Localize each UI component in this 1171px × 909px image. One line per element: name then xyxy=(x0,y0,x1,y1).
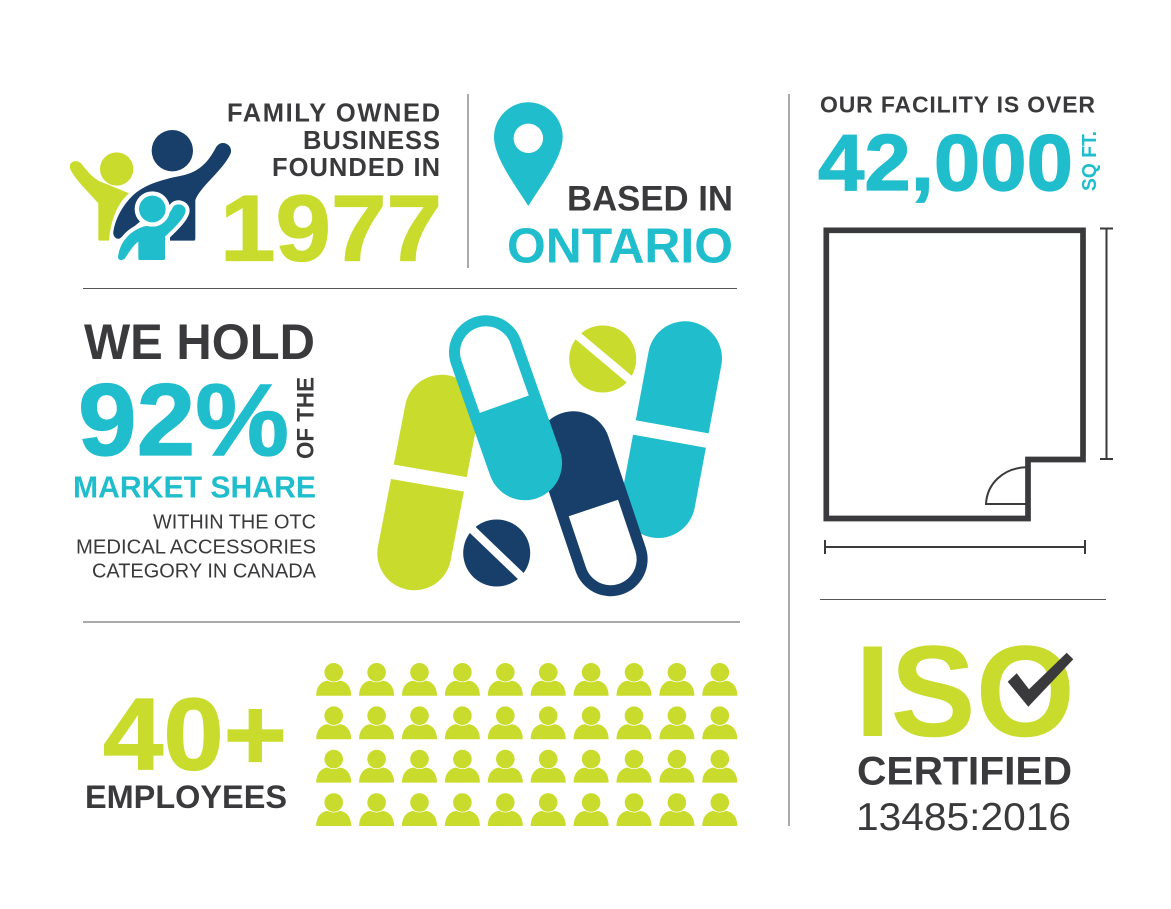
text: based in Ontario: BASED IN xyxy=(567,180,733,219)
text: based in Ontario: ONTARIO xyxy=(507,218,733,273)
heading: family owned business: BUSINESS xyxy=(303,127,440,155)
icon grid: employees xyxy=(316,663,737,826)
text: market share xyxy=(73,314,320,582)
number: 40+ employees: EMPLOYEES xyxy=(85,779,287,815)
badge: ISO certified: 13485:2016 xyxy=(856,796,1071,839)
badge: ISO certified: CERTIFIED xyxy=(857,750,1072,794)
text: facility size: SQ FT. xyxy=(1079,131,1101,191)
badge: ISO certified xyxy=(855,618,1075,839)
text: facility size xyxy=(818,92,1101,207)
text: market share: CATEGORY IN CANADA xyxy=(92,560,317,582)
text: facility size: 42,000 xyxy=(818,118,1073,207)
text: market share: OF THE xyxy=(292,377,320,459)
text: market share: MARKET SHARE xyxy=(73,470,316,504)
badge: ISO certified: ISO xyxy=(855,618,1075,764)
icon: family xyxy=(70,130,231,260)
number: 1977: 1977 xyxy=(220,176,442,280)
heading: family owned business: FOUNDED IN xyxy=(272,154,440,182)
icon: location pin xyxy=(494,102,563,206)
illustration: pills xyxy=(382,305,717,606)
heading: family owned business xyxy=(227,100,440,182)
text: market share: 92% xyxy=(78,363,289,477)
diagram: floor plan xyxy=(825,228,1113,554)
text: facility size: OUR FACILITY IS OVER xyxy=(820,92,1095,118)
heading: family owned business: FAMILY OWNED xyxy=(227,100,440,128)
text: market share: MEDICAL ACCESSORIES xyxy=(76,536,316,558)
number: 40+ employees: 40+ xyxy=(103,678,287,792)
text: market share: WITHIN THE OTC xyxy=(153,511,316,533)
text: based in Ontario xyxy=(507,180,733,273)
text: market share: WE HOLD xyxy=(84,314,315,370)
